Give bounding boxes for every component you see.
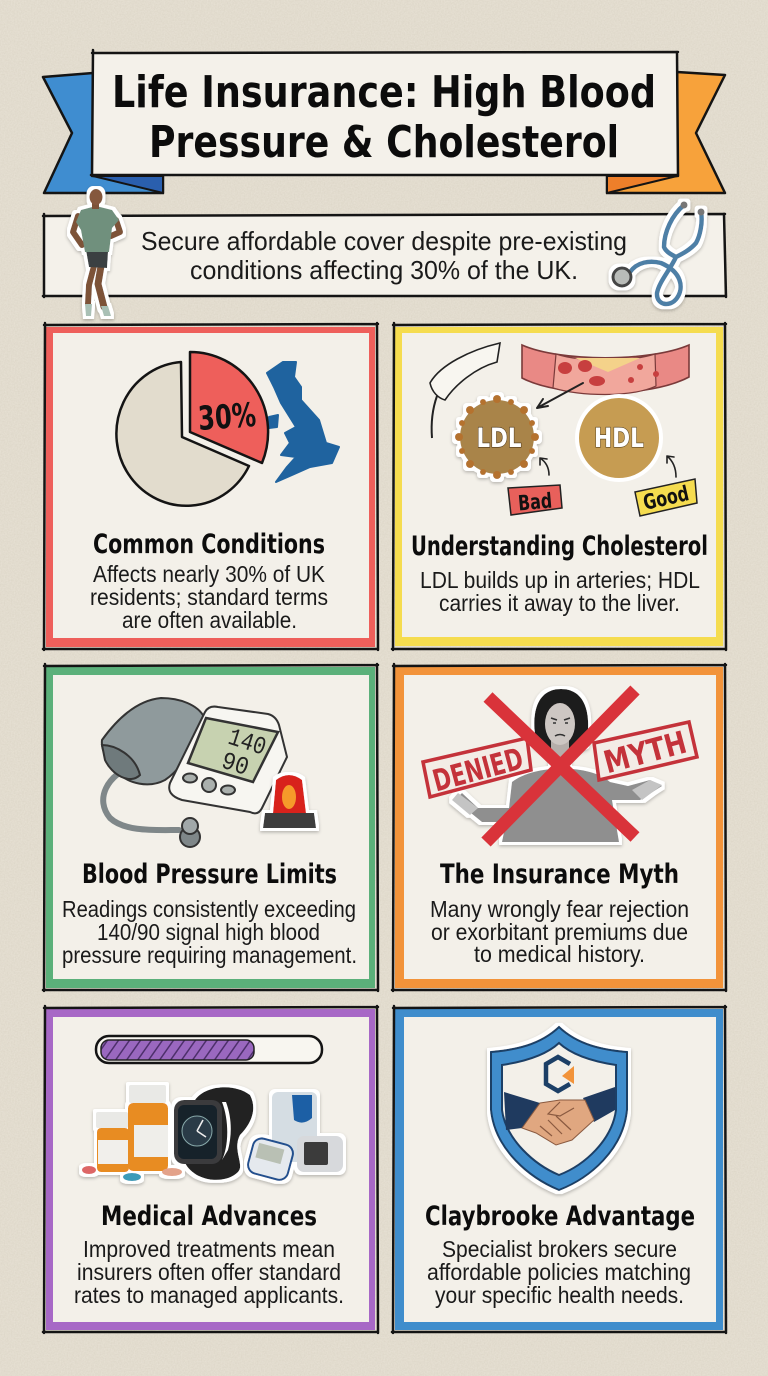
body text — [74, 1236, 344, 1308]
body text — [62, 896, 357, 968]
icon: monitor — [169, 707, 287, 813]
subtitle text: conditions affecting 30% of the UK. — [190, 255, 578, 285]
body text — [420, 567, 700, 616]
subtitle text: Secure affordable cover despite pre-existing — [141, 226, 627, 256]
body text: carries it away to the liver. — [439, 590, 680, 616]
icon: logo — [546, 1057, 574, 1091]
arrow: artery to LDL — [537, 383, 583, 408]
body text: Many wrongly fear rejection — [430, 896, 689, 922]
body text: are often available. — [122, 607, 297, 633]
tag: Bad — [508, 458, 562, 515]
icon: shield — [491, 1027, 627, 1190]
map: UK — [267, 362, 339, 482]
body text: affordable policies matching — [427, 1259, 691, 1285]
icon: monitor: 90 — [218, 747, 252, 783]
subtitle text — [141, 226, 627, 285]
body text — [427, 1236, 691, 1308]
body text: Affects nearly 30% of UK — [93, 561, 326, 587]
icon: LDL particle — [455, 395, 539, 479]
icon: HDL particle — [575, 394, 663, 482]
body text: to medical history. — [474, 941, 645, 967]
icon: runner — [73, 189, 120, 316]
body text: rates to managed applicants. — [74, 1282, 344, 1308]
icon: empty artery — [430, 343, 500, 438]
body text: insurers often offer standard — [77, 1259, 341, 1285]
panel: blood pressure limits — [43, 664, 378, 991]
panel: the insurance myth — [392, 664, 726, 991]
banner ribbon: blue left — [43, 73, 163, 193]
icon: monitor: 140 — [224, 723, 270, 762]
pie chart: 30%: 30% — [197, 395, 257, 438]
body text: 140/90 signal high blood — [97, 919, 320, 945]
icon: alarm siren — [263, 775, 316, 828]
title text: Pressure & Cholesterol — [149, 117, 619, 168]
heading: Claybrooke Advantage — [425, 1201, 695, 1232]
icon: blood pressure tube — [103, 763, 179, 830]
red cross — [486, 690, 635, 842]
pie chart: 30% — [116, 352, 268, 506]
body text — [430, 896, 689, 967]
icon: handshake — [504, 1087, 615, 1145]
body text: Specialist brokers secure — [442, 1236, 677, 1262]
panel: common conditions — [43, 323, 378, 650]
tag: Good — [635, 456, 697, 516]
panel: medical advances — [43, 1006, 378, 1333]
body text: pressure requiring management. — [62, 942, 357, 968]
icon: stethoscope — [613, 202, 704, 304]
title banner — [91, 50, 678, 176]
panel: claybrooke advantage — [392, 1006, 726, 1333]
heading: Common Conditions — [93, 529, 325, 560]
title text — [112, 67, 656, 168]
body text: or exorbitant premiums due — [431, 919, 688, 945]
tag: Bad: Bad — [517, 489, 553, 515]
heading: The Insurance Myth — [440, 859, 679, 890]
progress bar — [96, 1036, 322, 1063]
photo: worried woman — [452, 689, 662, 842]
icon: cuff — [102, 698, 204, 784]
heading: Medical Advances — [101, 1201, 317, 1232]
subtitle box — [43, 214, 726, 297]
icon: stethoscope head — [180, 818, 200, 847]
stamp: myth: MYTH — [600, 725, 690, 781]
stamp: denied: DENIED — [429, 742, 527, 799]
body text: Readings consistently exceeding — [62, 896, 356, 922]
tag: Good: Good — [641, 481, 691, 515]
body text: residents; standard terms — [90, 584, 328, 610]
heading: Blood Pressure Limits — [82, 859, 337, 890]
title text: Life Insurance: High Blood — [112, 67, 656, 118]
icon: blocked artery — [522, 345, 689, 394]
stamp: denied — [423, 738, 531, 799]
body text: Improved treatments mean — [83, 1236, 335, 1262]
icon: HDL particle: HDL — [594, 423, 644, 454]
icon: LDL particle: LDL — [476, 423, 522, 454]
banner ribbon: orange right — [607, 72, 725, 193]
icon: pill bottles and devices — [82, 1085, 343, 1182]
panel: understanding cholesterol — [392, 323, 726, 650]
body text — [90, 561, 328, 633]
body text: your specific health needs. — [435, 1282, 684, 1308]
body text: LDL builds up in arteries; HDL — [420, 567, 700, 593]
